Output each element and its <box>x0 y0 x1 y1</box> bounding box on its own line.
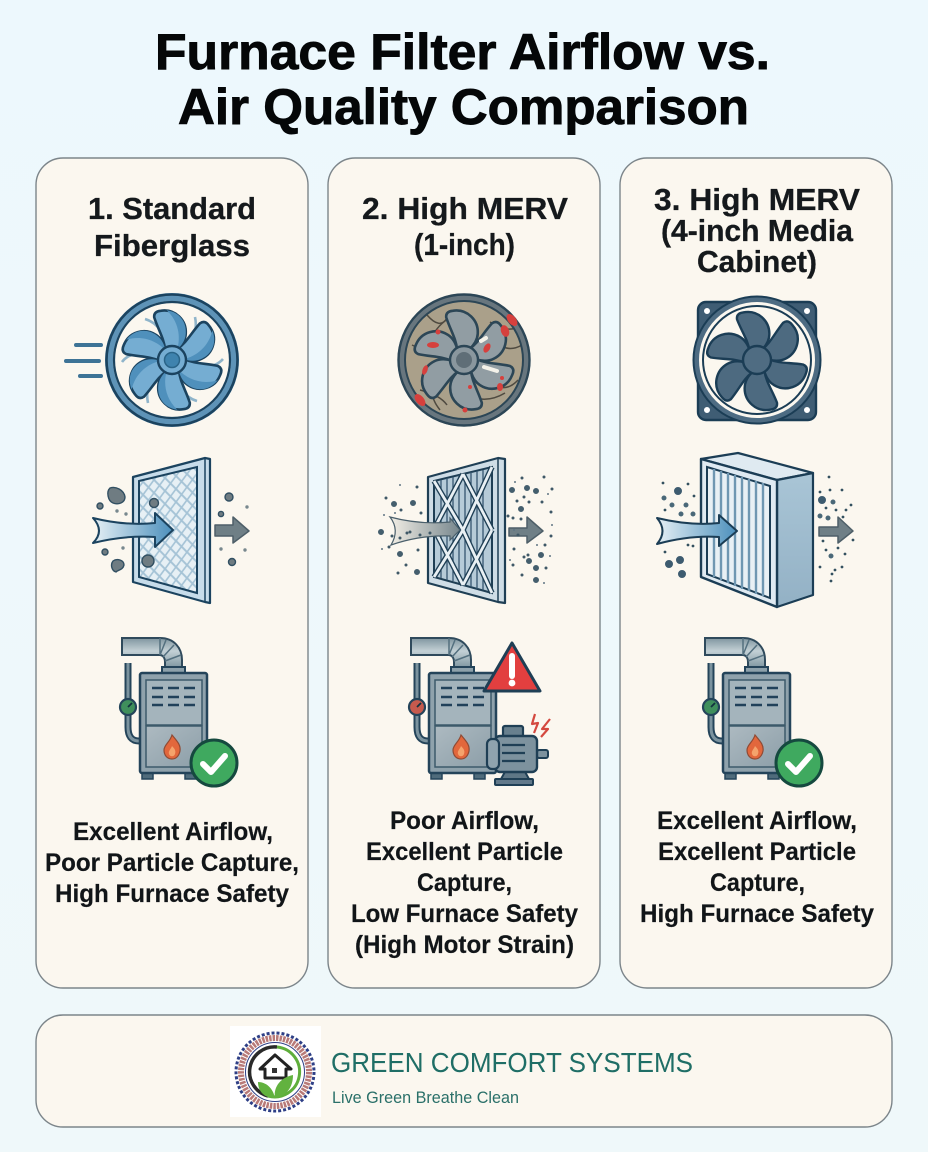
panel: high MERV 1-inch <box>328 158 600 988</box>
icon: warning triangle <box>484 643 540 691</box>
heading: high MERV 4-inch media cabinet: (4-inch Media <box>661 213 854 248</box>
title: Air Quality Comparison <box>178 79 749 135</box>
text: standard fiberglass summary <box>45 818 299 908</box>
icon: clean spinning fan <box>66 294 238 426</box>
text: high MERV 1-inch summary: Poor Airflow, <box>390 807 539 835</box>
text: high MERV 4-inch summary: Capture, <box>710 869 805 897</box>
text: high MERV 4-inch summary: Excellent Airflow, <box>657 807 857 835</box>
text: high MERV 1-inch summary <box>351 807 578 959</box>
text: high MERV 4-inch summary: High Furnace Safety <box>640 900 874 928</box>
heading: standard fiberglass: 1. Standard <box>88 191 256 226</box>
heading: high MERV 1-inch: (1-inch) <box>414 227 515 262</box>
icon: furnace with safe check <box>120 638 237 786</box>
icon: square housed fan <box>694 296 820 424</box>
title <box>155 24 770 135</box>
text: high MERV 1-inch summary: Capture, <box>417 869 512 897</box>
heading: high MERV 1-inch <box>362 191 568 262</box>
heading: standard fiberglass <box>88 191 256 263</box>
icon: deep media cabinet filter with particles <box>657 453 853 607</box>
icon: fiberglass filter with particles passing <box>93 458 249 603</box>
panel: high MERV 4-inch media cabinet <box>620 158 892 988</box>
icon: strained motor <box>487 714 550 785</box>
text: high MERV 1-inch summary: Low Furnace Safety <box>351 900 578 928</box>
heading: high MERV 4-inch media cabinet: Cabinet) <box>697 244 817 279</box>
text: standard fiberglass summary: Poor Particle Capture, <box>45 849 299 877</box>
icon: furnace with safe check <box>703 638 822 786</box>
panel: standard fiberglass <box>36 158 308 988</box>
text: standard fiberglass summary: Excellent Airflow, <box>73 818 273 846</box>
icon: strained furnace with warning and motor <box>409 638 550 785</box>
text: brand name and tagline <box>331 1047 693 1107</box>
title: Furnace Filter Airflow vs. <box>155 24 770 80</box>
text: high MERV 4-inch summary <box>640 807 874 928</box>
text: brand name and tagline: GREEN COMFORT SYSTEMS <box>331 1047 693 1078</box>
icon: pleated high MERV filter with particles <box>381 458 552 603</box>
heading: high MERV 4-inch media cabinet <box>654 182 860 279</box>
icon: clogged dirty fan <box>398 294 530 426</box>
text: standard fiberglass summary: High Furnace Safety <box>55 880 289 908</box>
panel: footer brand <box>36 1015 892 1127</box>
text: high MERV 4-inch summary: Excellent Particle <box>658 838 856 866</box>
text: high MERV 1-inch summary: (High Motor Strain) <box>355 931 574 959</box>
heading: standard fiberglass: Fiberglass <box>94 228 250 263</box>
text: brand name and tagline: Live Green Breathe Clean <box>332 1089 519 1107</box>
text: high MERV 1-inch summary: Excellent Particle <box>366 838 563 866</box>
heading: high MERV 4-inch media cabinet: 3. High MERV <box>654 182 860 217</box>
heading: high MERV 1-inch: 2. High MERV <box>362 191 568 226</box>
icon: company logo <box>230 1026 321 1117</box>
